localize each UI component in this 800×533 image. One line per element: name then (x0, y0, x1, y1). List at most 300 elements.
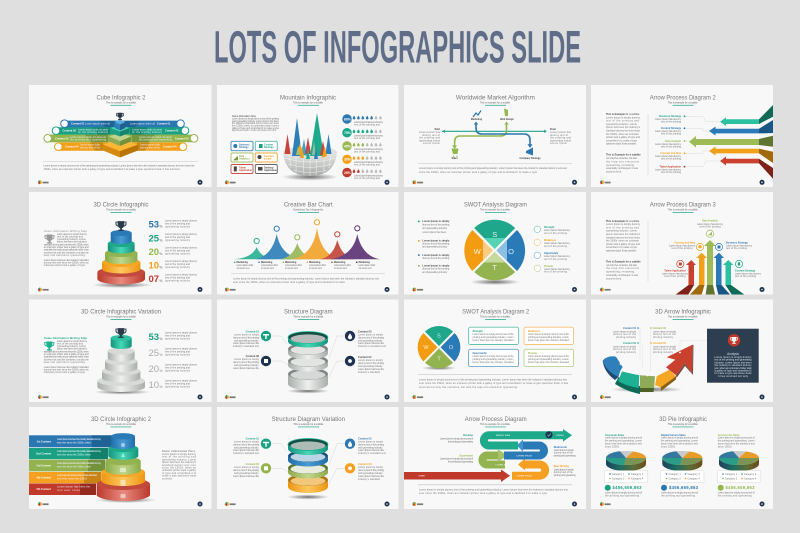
arrow labels: text of the printing (661, 133, 682, 136)
percentage rows: 30% (344, 158, 351, 162)
icon: marketing (473, 110, 481, 117)
right outlined items: Weakness (544, 239, 557, 242)
percentage descriptions: text of the printing and (165, 276, 191, 280)
right outlined items: Opportunity (544, 252, 559, 255)
totals: $456,659,863 (726, 485, 755, 490)
right text: Lorem Ipsum is simply (358, 440, 384, 444)
chart legend: sit amet text (358, 267, 372, 270)
info text with trophy: Lorem Ipsum is simply dummy (57, 340, 88, 343)
percentage descriptions: text of the printing and (165, 222, 191, 226)
arrow labels: text of the printing (735, 275, 757, 278)
divider (647, 220, 649, 282)
description text: Lorem Ipsum is simply dummy text of the printing and typesetting industry. Lorem Ipsum has been the industry's standard dummy text ever since the (44, 165, 195, 168)
content labels: dummy text of the (613, 333, 637, 336)
wing labels: Lorem ipsum dolor sit (130, 122, 155, 126)
analysis text: a galley of type and scrambled it (714, 370, 752, 372)
column headings and text (605, 434, 755, 448)
icon: red trophy badge (728, 334, 740, 346)
percentages: 25% (148, 234, 163, 244)
right outlined items: Strength (544, 226, 555, 229)
info text with trophy (44, 229, 89, 267)
arrow labels: Data Analytic (665, 140, 682, 143)
right text: Lorem Ipsum is simply (358, 359, 384, 362)
quadrant letters: S (437, 334, 441, 340)
slide subtitle: This is example for a subtitle (106, 102, 137, 105)
footer logo and button (225, 394, 390, 400)
content labels: Lorem Ipsum is simply (653, 345, 677, 348)
box labels and icons: Application (264, 169, 278, 172)
panel: creative bar chart (217, 192, 398, 294)
left text: specimen book. It has survived (606, 250, 637, 252)
info text with trophy: typesetting industry. Lorem (57, 345, 86, 348)
right outlined items: text of the printing (544, 245, 568, 248)
final text: the printing and (550, 137, 572, 140)
content labels (613, 327, 677, 354)
footer logo and button (600, 394, 764, 400)
percentage descriptions: Lorem Ipsum is simply dummy (165, 220, 198, 222)
analysis text (714, 352, 752, 378)
arrow labels: Lorem Ipsum has dummy (662, 272, 689, 276)
right text: industry's standard text (358, 452, 386, 455)
slide subtitle: This is example for a subtitle (293, 423, 324, 426)
wing labels: Content 04 (163, 144, 177, 148)
box labels and icons: Content (264, 144, 273, 146)
arrow band labels (419, 434, 564, 478)
chart legend: Lorem ipsum dolor (261, 264, 278, 267)
band labels: text ever since the 1500s (57, 477, 88, 480)
percentage rows: text of the printing and (354, 150, 381, 153)
title underline (110, 426, 132, 428)
final text (550, 128, 572, 145)
box text: Strength (472, 330, 483, 333)
band labels: 3rd Content (36, 463, 51, 467)
side text: make a type specimen book (162, 475, 197, 478)
arrow labels: text of the printing (661, 158, 682, 161)
right outlined items: Threats (544, 265, 554, 268)
quadrant letters: O (508, 247, 514, 256)
percentage descriptions: Lorem Ipsum is simply dummy (165, 364, 198, 366)
icon: trophy (116, 113, 124, 120)
cylinder icons (120, 443, 126, 498)
box labels and icons: Concept (264, 155, 274, 158)
info text with trophy: scrambled it to make a type specimen book. It has (44, 249, 89, 252)
percentage descriptions: typesetting industry (165, 252, 191, 256)
stacked rings (287, 332, 329, 394)
left bullet list: and typesetting industry (422, 227, 448, 230)
left text: Lorem Ipsum is simply dummy text of (440, 437, 473, 440)
footer logo and button (225, 180, 390, 185)
intro text: Lorem Ipsum is simply dummy text of the printing (232, 118, 280, 121)
column headings and text: Ipsum has been the industry's text (605, 442, 642, 446)
footer logo and button (413, 394, 577, 400)
icon circles (261, 331, 355, 366)
right text (358, 330, 386, 374)
slide subtitle: This is example for a subtitle (668, 316, 698, 319)
panel: mountain infographic (217, 85, 398, 187)
analysis text: text of the printing and typesetting (714, 359, 752, 362)
percentages (148, 332, 163, 391)
chart legend (234, 261, 376, 270)
info text with trophy: scrambled it to make a type specimen book. It has (44, 356, 89, 359)
slide title: SWOT Analysis Diagram (464, 202, 527, 209)
slide subtitle: This is example for a subtitle (106, 208, 137, 211)
content labels: dummy text of the (613, 348, 637, 351)
percentage descriptions: Lorem Ipsum is simply dummy (165, 246, 198, 250)
left text: industry's standard text (233, 345, 259, 348)
stacked coloured rings (287, 438, 329, 500)
final text: typesetting indust (550, 139, 571, 142)
box labels and icons: Data (239, 155, 245, 158)
panel: 3D circle infographic (29, 192, 212, 294)
chart legend: Marketing (285, 261, 297, 264)
right text: Lorem Ipsum is simply (554, 449, 574, 452)
percentage descriptions: Lorem Ipsum is simply dummy (165, 380, 198, 382)
left text: This is Example for a subtitle (606, 220, 640, 223)
info text with trophy: Lorem Ipsum has been the industry's standard (44, 259, 89, 262)
percentage descriptions: Lorem Ipsum is simply dummy (165, 233, 198, 236)
panel: arrow process diagram 2 (591, 85, 773, 187)
left text: Lorem Ipsum is simply dummy (606, 116, 641, 119)
slide title: 3D Circle Infographic 2 (91, 416, 152, 423)
intro text: and typesetting industry. Lorem Ipsum has been (232, 120, 280, 123)
percentage rows: Lorem Ipsum has been dummy (354, 161, 384, 164)
panel: structure diagram (217, 300, 398, 402)
wing labels: Content 01 (71, 122, 85, 126)
chart legend: Marketing (236, 261, 248, 264)
slide subtitle: This is example for a subtitle (668, 208, 698, 211)
content labels: dummy text of the (653, 333, 677, 336)
left text (606, 220, 641, 280)
icon: check badge (545, 431, 553, 438)
slide title: Worldwide Market Algorithm (456, 94, 535, 102)
percentage rows: Lorem Ipsum has been dummy (354, 134, 384, 138)
start text (419, 128, 441, 145)
slide subtitle: This is example for a subtitle (293, 102, 324, 105)
slide title: Cube Infographic 2 (96, 94, 146, 102)
footer logo and button (38, 394, 202, 400)
box text: Lorem Ipsum is simply dummy text of the (528, 333, 570, 336)
analysis text: it has survived not only (718, 375, 749, 378)
footer logo and button (600, 180, 764, 185)
right text: and typesetting industry. (358, 339, 383, 342)
slide subtitle: This is example for a subtitle (106, 423, 137, 426)
slide title: Arrow Process Diagram (465, 416, 527, 423)
left text: industry's standard text (233, 452, 259, 455)
slide title: Creative Bar Chart (284, 202, 333, 209)
slide subtitle: Marketing Top Infographic (293, 208, 324, 211)
route labels: Web Design (500, 118, 514, 121)
slide title: Structure Diagram (284, 309, 333, 316)
info text with trophy: Ipsum has been the industry's (57, 241, 88, 244)
band labels: 5th Content (36, 487, 51, 491)
chart: mountain spikes in bowl (282, 113, 338, 180)
route labels: Sales (451, 157, 458, 160)
percentage descriptions (165, 220, 198, 282)
content labels: Content 03 (653, 327, 667, 330)
intro text: galley of type and scrambled it to make a type (232, 127, 280, 130)
percentage descriptions: typesetting industry (165, 226, 191, 228)
arrow labels: Talent Application (660, 166, 681, 168)
arrow labels: Content Strategy (735, 270, 756, 272)
content labels: Content 02 (623, 342, 637, 345)
analysis text: text. when an unknown printer took (714, 367, 752, 370)
wing labels: the printing and typesetting (70, 139, 107, 142)
left text: printer took a galley of type and (606, 243, 641, 246)
wing labels: Content 04 (65, 144, 79, 148)
content labels: dummy text of the (653, 348, 677, 351)
start text: Lorem Ipsum has (419, 131, 441, 134)
left text: not only five centuries, but also (606, 157, 638, 160)
box text: Ipsum has been the industry standard (528, 361, 570, 364)
icon: trophy (116, 328, 126, 338)
info text with trophy: survived not only five centuries, but also the (44, 358, 89, 361)
left text: This is Example for a subtitle (606, 260, 641, 263)
right text: Lorem Ipsum has been the (358, 449, 385, 452)
panel: SWOT analysis diagram (404, 192, 586, 294)
intro text: the 1500s, when an unknown printer took a (232, 124, 280, 128)
column headings and text: Digital Camera Sales (661, 434, 686, 437)
legend items: Category 1 (668, 473, 681, 476)
right text: Lorem Ipsum is simply (554, 468, 574, 471)
info text with trophy: leap into electronic typesetting. (44, 361, 86, 364)
footer logo and button (600, 287, 764, 292)
arrow labels: Business Strategy (659, 115, 682, 118)
analysis text: to make a type specimen book (714, 372, 752, 375)
left bullet list: dummy text of the printing (422, 243, 450, 246)
chart: peak bars (234, 228, 380, 259)
right text: Lorem Ipsum is simply (358, 334, 384, 336)
legend items: Category 3 (631, 473, 644, 476)
percentage rows: 45% (344, 144, 351, 148)
slide title: Arrow Process Diagram 2 (650, 94, 716, 102)
rule (231, 272, 385, 275)
column headings and text: Lorem Ipsum is simply dummy text of (718, 436, 755, 440)
panel: 3D circle infographic variation (29, 300, 212, 402)
arrow labels: text of the printing (661, 121, 682, 124)
arrow labels: Lorem Ipsum has dummy (655, 130, 682, 133)
percentage descriptions: text of the printing and (165, 263, 191, 266)
left text: dummy text of the printing (233, 469, 260, 472)
totals descriptions: the printing and typesetting (661, 494, 696, 498)
percentage descriptions: typesetting industry (165, 280, 191, 282)
rule (418, 373, 572, 376)
left text: the leap into electronic (606, 160, 640, 163)
right text: Content 04 (358, 355, 372, 359)
footer logo and button (225, 287, 390, 292)
right text: and typesetting industry. (358, 446, 383, 449)
percentage descriptions: typesetting industry (165, 239, 191, 242)
left text: the leap into electronic (606, 267, 640, 270)
left text: This is Example for a subtitle (606, 154, 641, 156)
route labels (451, 118, 541, 160)
info text with trophy: text of the printing and (57, 235, 84, 238)
icon circles (261, 438, 355, 473)
percentage descriptions: text of the printing and (165, 350, 191, 354)
quadrant letters: W (423, 345, 429, 351)
left text: Lorem Ipsum has been the (233, 449, 260, 452)
side text (162, 450, 197, 480)
footer logo and button (413, 287, 577, 292)
totals: $456,659,863 (669, 485, 699, 490)
percentage descriptions: text of the printing and (165, 382, 191, 386)
content labels: Content 04 (653, 342, 667, 345)
arrow labels: Lorem Ipsum has dummy (726, 245, 753, 248)
chart legend: Lorem ipsum dolor (309, 264, 326, 267)
info text with trophy: Some Information Writing Step (44, 229, 88, 233)
arrow labels: Concept and Idea (674, 242, 696, 245)
arrow labels: Lorem Ipsum has dummy (735, 272, 762, 276)
left bullet list: dummy text of the printing (422, 268, 450, 271)
column headings and text: since 1500s (718, 446, 732, 448)
icon: trophy (116, 221, 126, 231)
panel: structure diagram variation (217, 407, 398, 509)
wing labels (55, 122, 189, 149)
description text: since the 1500s, when an unknown printer took a galley of type and scrambled it to make a type (419, 171, 538, 174)
arrow labels: Lorem Ipsum has dummy (655, 155, 682, 158)
totals (605, 485, 755, 491)
intro text: the industry's standard dummy text ever since (232, 122, 280, 125)
left bullet list: dummy text of the printing (422, 257, 450, 260)
wing labels: Content 03 (175, 136, 189, 140)
panel: 3D circle infographic 2 (29, 407, 212, 509)
left text: Lorem Ipsum is simply (234, 358, 260, 361)
intro text (232, 115, 280, 132)
wing labels: Lorem ipsum dolor sit amet on (70, 136, 107, 139)
panel: arrow process diagram 3 (591, 192, 773, 294)
chart legend: Lorem ipsum dolor (236, 264, 254, 267)
info text with trophy: Some Information Writing Step (44, 336, 87, 340)
info text with trophy: standard dummy text ever since the 1500s, when (44, 350, 89, 354)
percentage rows: Lorem Ipsum has been dummy (354, 148, 384, 151)
right text: printing and typesetting (554, 454, 576, 457)
percentage descriptions: typesetting industry (165, 386, 191, 388)
side text: since the 1500s, when an (162, 466, 197, 470)
info text with trophy: an unknown printer took a galley of type and (44, 353, 89, 356)
right outlined items (534, 226, 571, 274)
left text: the 1500s, when an unknown (606, 240, 640, 243)
right text: dummy text of the printing (358, 469, 385, 472)
chart legend: sit amet text (334, 267, 347, 270)
description text: Lorem Ipsum is simply dummy text of the printing and typesetting industry. Lorem Ipsum has been the industry's standard dummy text (419, 378, 567, 381)
connector lines (272, 336, 344, 377)
slide title: Structure Diagram Variation (272, 416, 345, 423)
totals descriptions (605, 492, 755, 498)
arrow band labels: BRIGHT IDEA (496, 434, 511, 437)
left text: text of the printing and (606, 226, 640, 229)
totals descriptions: Lorem Ipsum is simply dummy text of (605, 492, 642, 494)
side text: standard dummy text ever (162, 464, 196, 467)
arrow labels: Lorem Ipsum has dummy (655, 143, 682, 146)
chart legend: Marketing (261, 261, 273, 264)
slide title: SWOT Analysis Diagram 2 (462, 309, 530, 316)
box text: Threats (528, 352, 538, 355)
slide title: 3D Pie Infographic (659, 416, 707, 423)
legend items: Category 1 (725, 473, 738, 476)
panel: 3D pie infographic (591, 407, 773, 509)
legend items: Category 4 (744, 478, 757, 480)
right text: industry's standard text (358, 345, 386, 348)
description text: Lorem Ipsum is simply dummy text of the printing and typesetting industry. Lorem Ipsum has been the industry's standard dummy text (233, 277, 379, 280)
right outlined items: Lorem Ipsum has dummy (544, 242, 571, 245)
left bullet list (418, 220, 450, 274)
title underline (672, 104, 694, 107)
box text: printing and typesetting industry. Lorem (528, 336, 569, 339)
serpentine arrows (404, 429, 572, 482)
description text (419, 488, 568, 495)
left text: and typesetting industry. (234, 339, 259, 342)
intro text: specimen book. It has survived not only (232, 129, 277, 132)
percentage descriptions: Lorem Ipsum is simply dummy (165, 348, 198, 350)
slide subtitle: This is example for a subtitle (480, 102, 511, 105)
right text: Brainstorm (554, 446, 568, 449)
arrow band labels: FINISH (556, 435, 564, 437)
SWOT boxes (469, 327, 574, 367)
title underline (298, 318, 319, 321)
band labels: Lorem Ipsum has been the (57, 486, 91, 488)
footer logo and button (413, 180, 577, 185)
left bullet list: and typesetting industry (422, 246, 448, 249)
chart legend: Marketing (358, 261, 370, 264)
percentage descriptions: text of the printing and (165, 334, 191, 338)
rule (43, 160, 198, 163)
left text: popularised. (606, 277, 622, 280)
chart legend: Marketing (309, 261, 321, 264)
arrow labels: Business Strategy (726, 242, 748, 245)
slide subtitle: This is example for a subtitle (480, 208, 511, 211)
panel: 3D arrow infographic (591, 300, 773, 402)
panel: SWOT analysis diagram 2 (404, 300, 586, 402)
description text (233, 277, 379, 284)
footer logo and button (413, 502, 577, 506)
left bullet list: and typesetting industry (422, 271, 448, 274)
left text: essentially unchanged. It was (606, 167, 639, 170)
start text: Lorem Ipsum (423, 142, 440, 145)
title underline (110, 318, 132, 321)
arrow labels: Lorem Ipsum has dummy (697, 223, 724, 226)
title underline (110, 104, 132, 107)
stacked cylinder (92, 230, 152, 288)
side text: survived (162, 477, 173, 480)
chart legend: Lorem ipsum dolor (285, 264, 302, 267)
slide title: Mountain Infographic (280, 94, 336, 102)
stepped cube pyramid (103, 120, 138, 158)
column headings and text: the printing and typesetting. Lorem (605, 440, 642, 442)
box text: Lorem Ipsum is simply dummy text of the (472, 333, 514, 336)
description text (419, 378, 569, 389)
box labels and icons: Strategy (264, 146, 274, 149)
percentage descriptions: text of the printing and (165, 366, 191, 370)
box labels and icons: & Idea (264, 158, 272, 161)
chart legend: sit amet text (261, 267, 274, 270)
left text: standard dummy text ever since (606, 130, 641, 132)
title underline (485, 211, 506, 214)
chart legend: Marketing (334, 261, 346, 264)
side text: Lorem Ipsum is simply dummy (162, 453, 197, 456)
left text: the printing and typesetting (448, 461, 474, 464)
wing labels: Content 02 (165, 129, 179, 133)
right text: Lorem Ipsum has been the (358, 368, 385, 371)
box text: printing and typesetting industry. Lorem (472, 358, 514, 361)
column headings and text: Ipsum has been the industry's text (661, 442, 698, 446)
legend items: Category 3 (688, 473, 700, 476)
arrow labels: text of the printing (726, 247, 748, 250)
left text: standard dummy text ever since (606, 236, 641, 239)
wing labels: dummy text of the (80, 146, 101, 149)
arrow labels: Data Analytic (702, 220, 718, 223)
right text: Content 03 (358, 330, 372, 334)
percentage rows: text of the printing and (354, 137, 381, 140)
arrow labels: text of the printing (672, 247, 693, 250)
